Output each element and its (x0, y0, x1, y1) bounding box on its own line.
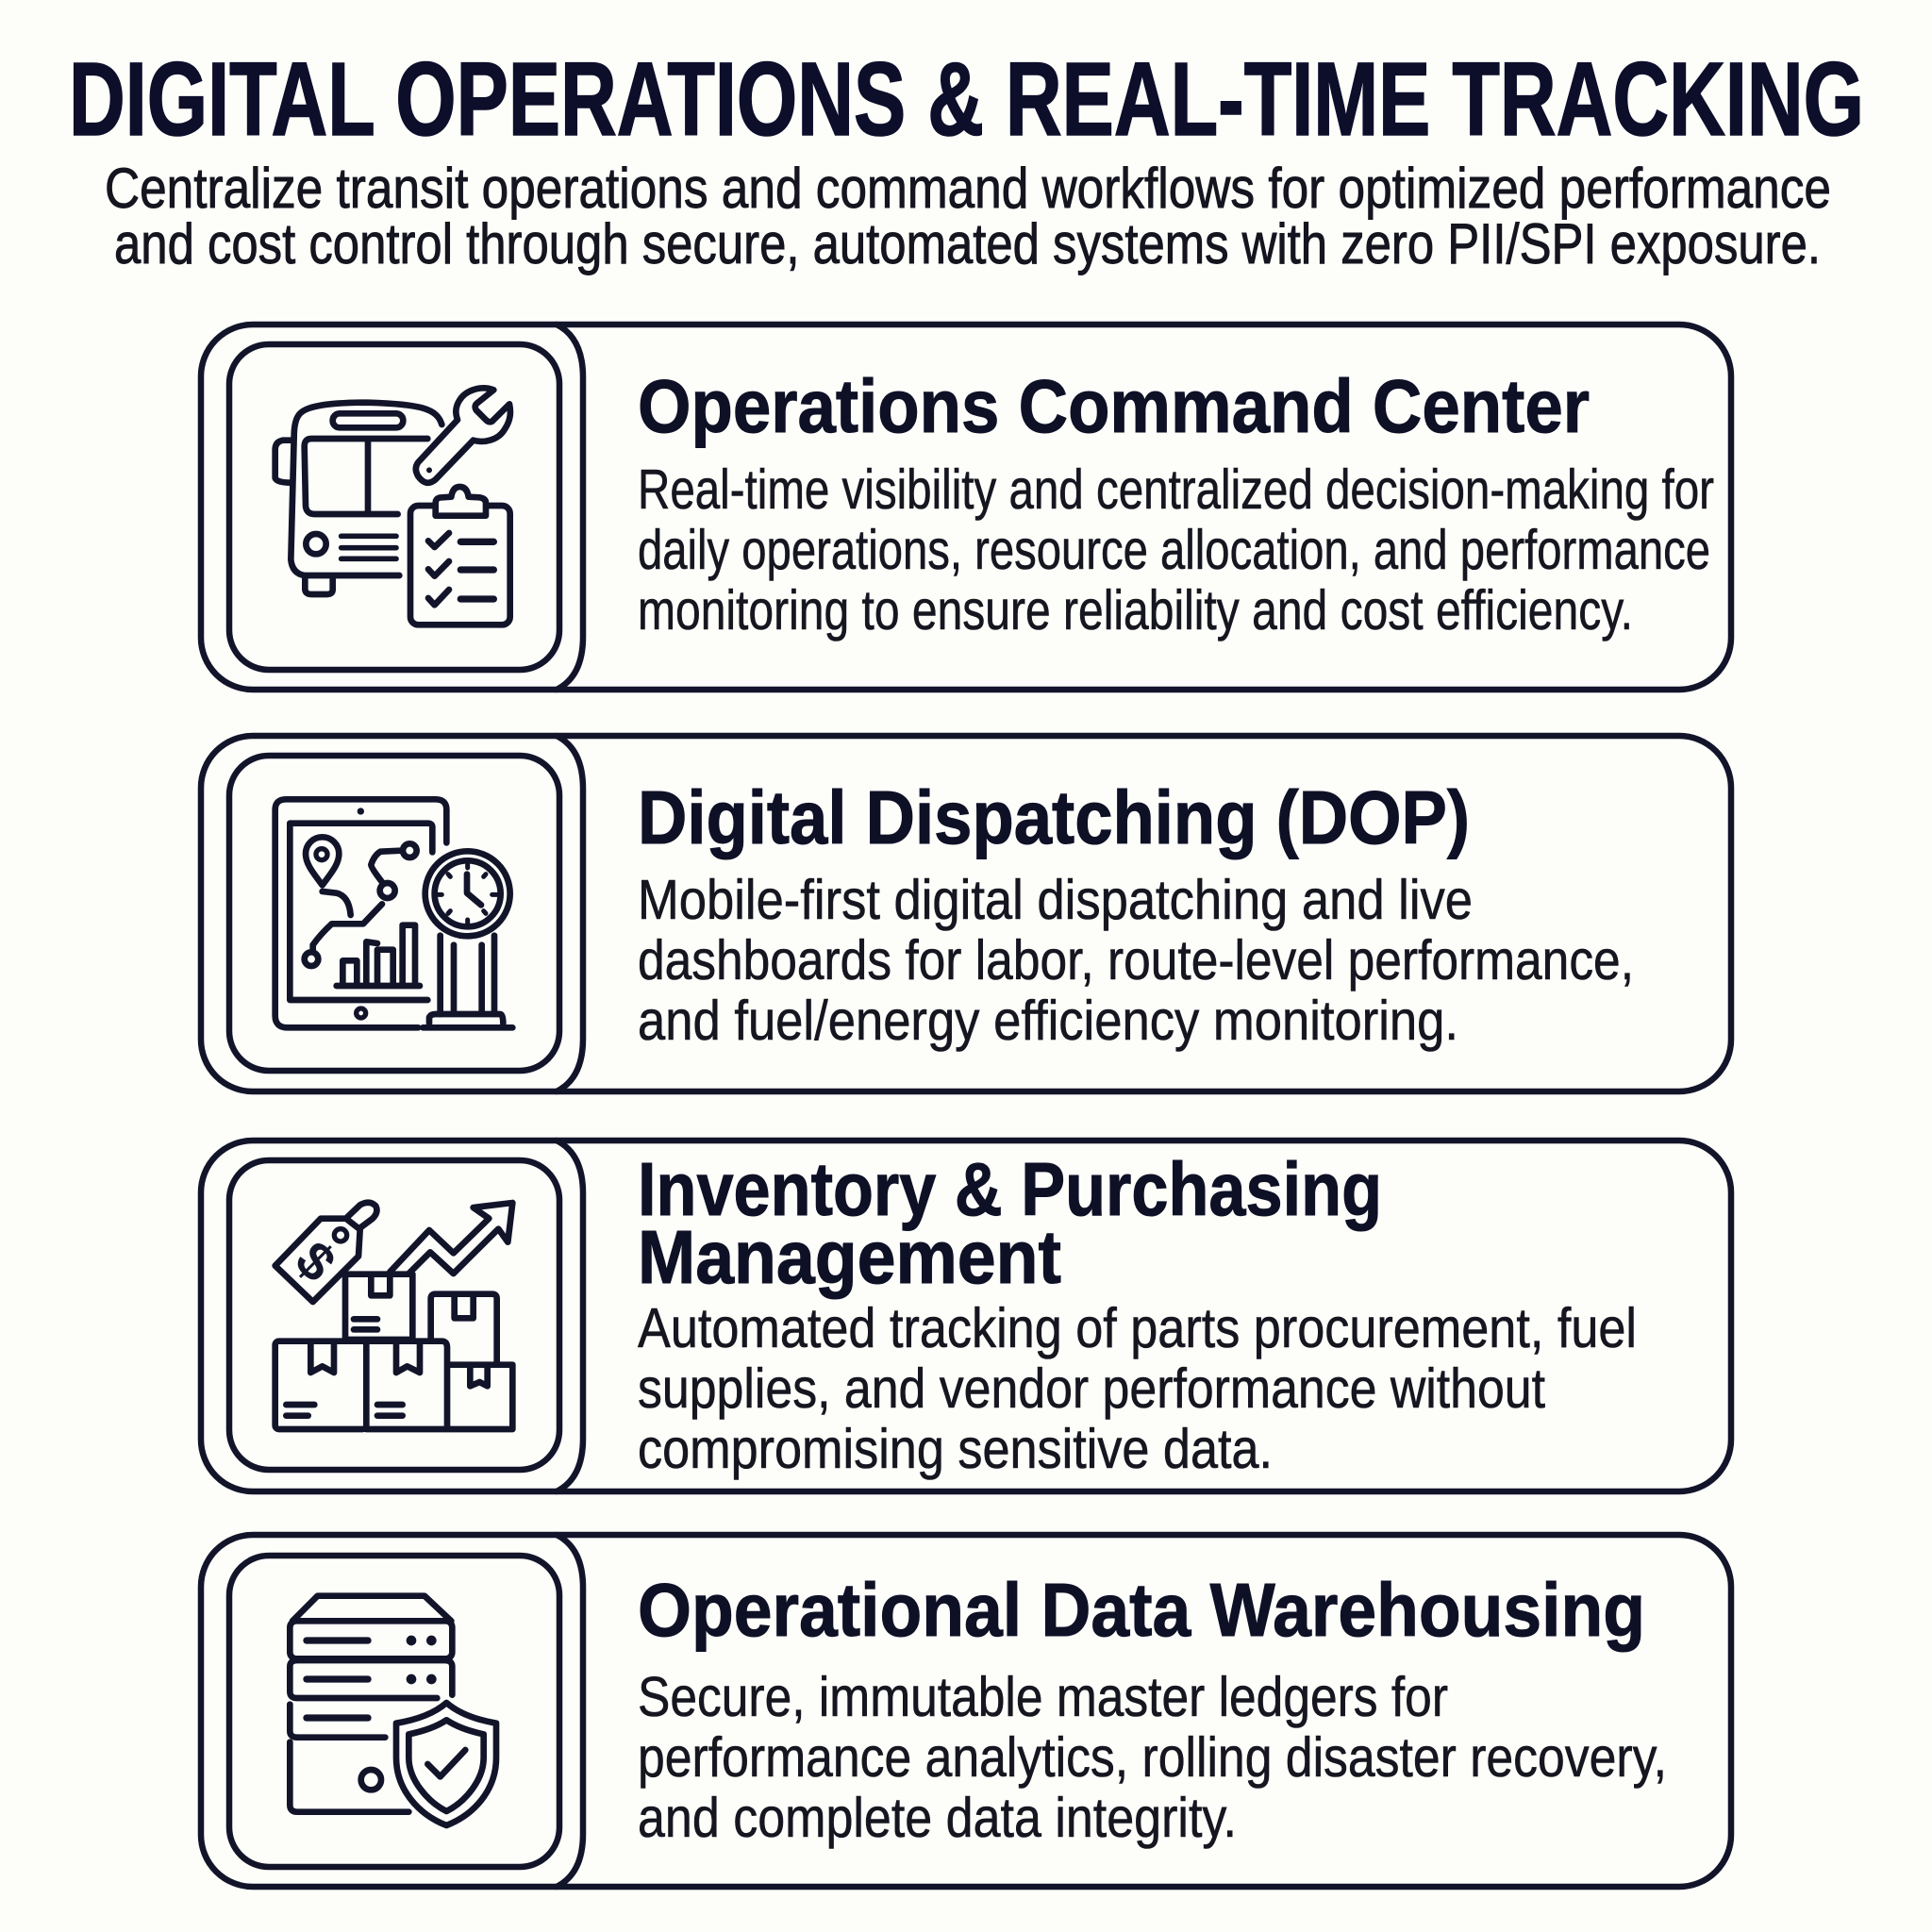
card frame (201, 1141, 1731, 1491)
body text: performance analytics, rolling disaster recovery, (638, 1726, 1667, 1789)
body text (638, 1666, 1667, 1849)
body text: monitoring to ensure reliability and cost efficiency. (638, 579, 1633, 641)
body text: compromising sensitive data. (638, 1418, 1273, 1480)
heading: Operations Command Center (638, 364, 1590, 448)
card frame (201, 1535, 1731, 1887)
icon: bus, wrench and checklist (275, 388, 510, 625)
heading: Inventory & Purchasing (638, 1147, 1382, 1231)
icon: price tag, boxes and growth arrow: $ (284, 1230, 346, 1293)
body text: dashboards for labor, route-level performance, (638, 929, 1634, 991)
panel: operational data warehousing (201, 1535, 1731, 1887)
body text: Automated tracking of parts procurement, fuel (638, 1297, 1637, 1359)
body text (638, 458, 1714, 641)
body text: Secure, immutable master ledgers for (638, 1666, 1448, 1728)
panel: inventory and purchasing (201, 1141, 1731, 1491)
panel: digital dispatching (201, 736, 1731, 1091)
heading: Operational Data Warehousing (638, 1568, 1645, 1652)
card frame (201, 736, 1731, 1091)
body text (638, 1297, 1637, 1480)
heading: Digital Dispatching (DOP) (638, 775, 1470, 859)
panel: operations command center (201, 325, 1731, 690)
icon: price tag, boxes and growth arrow (275, 1203, 512, 1429)
heading: Management (638, 1215, 1061, 1299)
icon: server stack and shield (290, 1596, 496, 1825)
body text: and complete data integrity. (638, 1787, 1237, 1849)
heading (638, 1147, 1382, 1299)
icon: tablet map and clock (275, 799, 512, 1027)
body text: Mobile-first digital dispatching and live (638, 869, 1473, 931)
subtitle (105, 157, 1831, 275)
body text (638, 869, 1634, 1052)
body text: supplies, and vendor performance without (638, 1357, 1545, 1420)
body text: and fuel/energy efficiency monitoring. (638, 990, 1458, 1052)
card frame (201, 325, 1731, 690)
